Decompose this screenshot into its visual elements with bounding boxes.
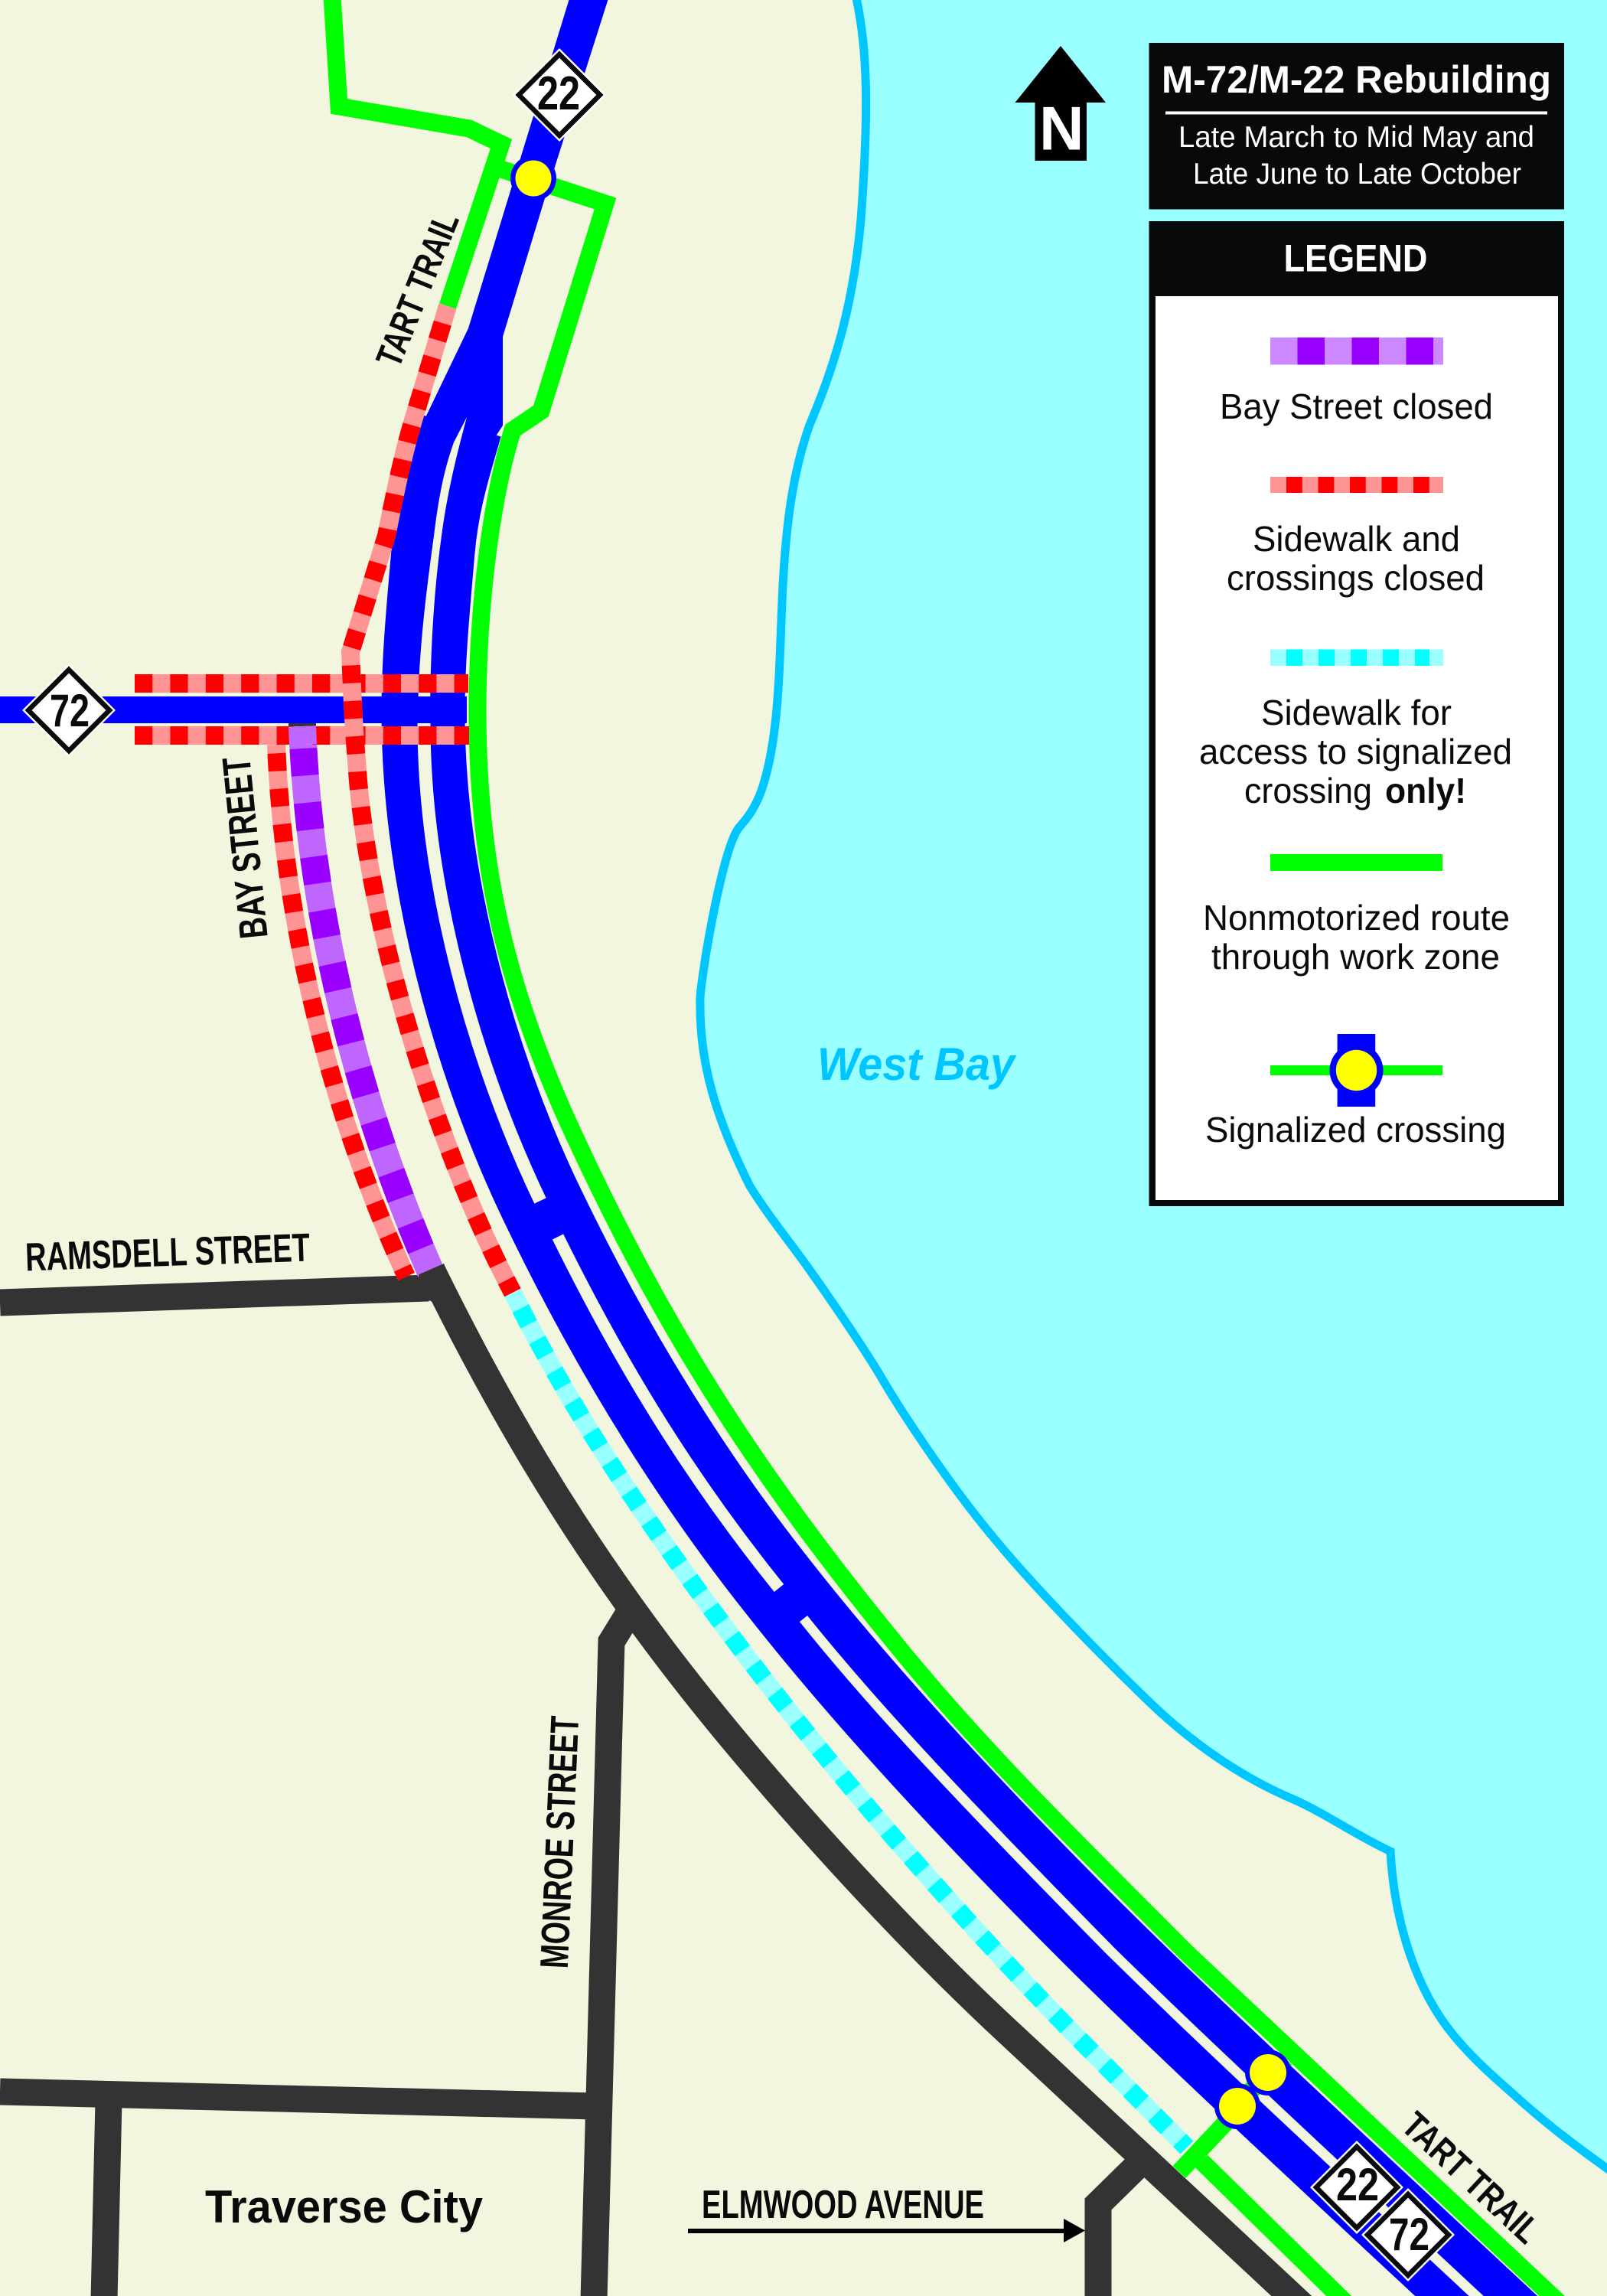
- sidewalk closed: west of Bay Street: [276, 745, 406, 1277]
- legend item: Sidewalk for access to signalized crossing only: only!: [1385, 771, 1466, 810]
- shield: M-72 west: 72: [50, 685, 90, 736]
- bay street over crossing: [302, 726, 303, 745]
- legend item: Sidewalk for access to signalized crossing only: [1199, 649, 1512, 810]
- legend heading: LEGEND: [1284, 237, 1428, 280]
- title panel: Late June to Late October: [1193, 158, 1521, 191]
- legend item: Nonmotorized route through work zone: Nonmotorized route: [1203, 898, 1510, 938]
- title panel: M-72/M-22 Rebuilding: [1162, 58, 1551, 101]
- signal: north crossing: [510, 155, 556, 201]
- legend item: Sidewalk for access to signalized crossing only: Sidewalk for: [1261, 693, 1452, 732]
- label: Monroe Street: MONROE STREET: [533, 1715, 588, 1969]
- title panel: Late March to Mid May and: [1178, 121, 1534, 154]
- signal: south crossing east: [1245, 2050, 1291, 2095]
- title panel: [1149, 43, 1564, 210]
- sidewalk closed: trail and east of Bay Street: [350, 306, 513, 1293]
- legend item: Nonmotorized route through work zone: [1203, 854, 1510, 977]
- median gaps: [418, 417, 1530, 2296]
- city streets: [0, 1288, 1140, 2296]
- legend panel: [1149, 221, 1564, 1206]
- bay street closure: [288, 723, 431, 1272]
- legend item: Nonmotorized route through work zone: through work zone: [1211, 937, 1500, 977]
- label: Bay Street: BAY STREET: [214, 755, 277, 941]
- label: Elmwood Avenue: ELMWOOD AVENUE: [702, 2183, 984, 2227]
- shield: M-22 south: [1310, 2141, 1403, 2234]
- shield: M-72 south: [1361, 2188, 1455, 2281]
- arrow: to Elmwood Avenue: [688, 2219, 1085, 2242]
- label: Ramsdell Street: RAMSDELL STREET: [24, 1226, 311, 1280]
- label: Tart Trail south: TART TRAIL: [1394, 2105, 1547, 2252]
- water: West Bay: [700, 0, 1607, 2177]
- legend item: Bay Street closed: Bay Street closed: [1220, 386, 1493, 426]
- label: Traverse City: Traverse City: [205, 2181, 484, 2232]
- Ramsdell corner: [413, 1264, 453, 1302]
- label: West Bay: West Bay: [817, 1039, 1017, 1090]
- green link at lower crossing: [1244, 2080, 1261, 2099]
- M-72 road: [0, 696, 467, 723]
- signal: south crossing west: [1214, 2083, 1260, 2129]
- icon: north arrow: [1015, 46, 1106, 164]
- legend item: Sidewalk for access to signalized crossing only: crossing: [1244, 771, 1372, 810]
- legend item: Bay Street closed: [1220, 338, 1493, 426]
- legend item: Sidewalk for access to signalized crossing only: access to signalized: [1199, 732, 1512, 771]
- legend item: Sidewalk and crossings closed: crossings closed: [1227, 558, 1485, 598]
- legend item: Signalized crossing: Signalized crossing: [1205, 1110, 1506, 1150]
- legend item: Sidewalk and crossings closed: [1227, 477, 1485, 598]
- shield: M-72 west: [22, 664, 116, 757]
- legend item: Signalized crossing: [1205, 1034, 1506, 1150]
- shield: M-22 north: [513, 48, 606, 142]
- shield: M-72 south: 72: [1389, 2209, 1429, 2260]
- shield: M-22 south: 22: [1336, 2159, 1379, 2210]
- main road dark street: [432, 1270, 1339, 2296]
- sidewalk closed: M-72 crossings: [135, 674, 469, 745]
- icon: north arrow: N: [1039, 95, 1084, 164]
- nonmotorized route: north trail: [332, 0, 1576, 2296]
- roadway: M-22 / M-72: [418, 0, 1530, 2296]
- label: Tart Trail north: TART TRAIL: [369, 207, 468, 373]
- sidewalk for access to signalized crossing: [513, 1293, 1187, 2148]
- legend item: Sidewalk and crossings closed: Sidewalk and: [1253, 519, 1460, 559]
- shield: M-22 north: 22: [537, 67, 580, 120]
